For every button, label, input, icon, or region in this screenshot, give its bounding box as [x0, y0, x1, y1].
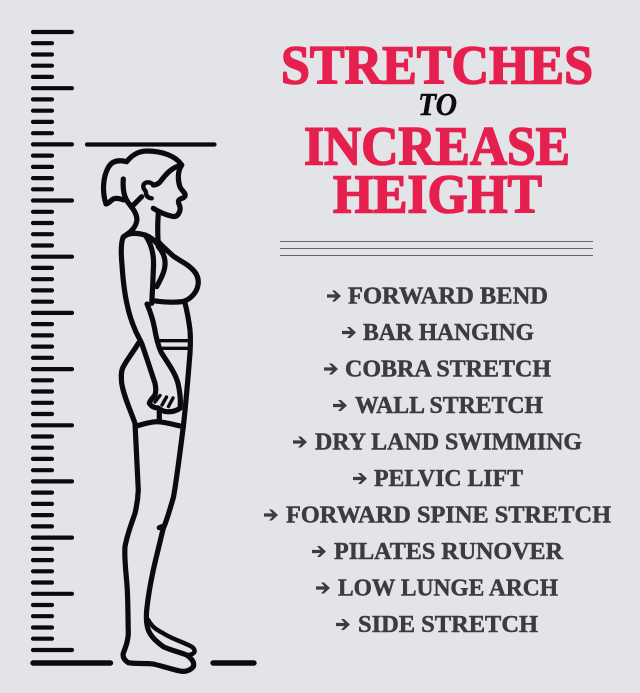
item: cobra stretch: COBRA STRETCH	[345, 356, 551, 382]
item: dry land swimming: DRY LAND SWIMMING	[315, 430, 582, 456]
item: bar hanging: BAR HANGING	[363, 320, 534, 346]
bust and bra	[153, 242, 198, 302]
shorts hem and hand link	[137, 410, 183, 427]
waistband	[160, 341, 190, 348]
title	[281, 34, 593, 224]
second foot	[148, 620, 195, 655]
ground line	[33, 660, 254, 666]
item: wall stretch: WALL STRETCH	[355, 393, 543, 419]
item: forward bend: FORWARD BEND	[348, 284, 548, 310]
title line: height: HEIGHT	[333, 164, 542, 224]
neck back and hair inner line	[123, 179, 142, 237]
face profile	[153, 165, 185, 217]
inner arm and forearm	[145, 235, 180, 412]
item: low lunge arch: LOW LUNGE ARCH	[338, 576, 558, 602]
icon: standing woman outline	[104, 151, 198, 671]
knee mark	[159, 526, 164, 528]
item: forward spine stretch: FORWARD SPINE STRETCH	[286, 502, 611, 528]
item: pelvic lift: PELVIC LIFT	[374, 466, 523, 492]
triple divider lines	[280, 242, 593, 256]
shoulder and back of arm	[121, 233, 158, 408]
list of stretches	[264, 284, 611, 638]
hair and ponytail	[104, 151, 182, 204]
height marker line above head	[87, 142, 214, 147]
item: pilates runover: PILATES RUNOVER	[334, 539, 564, 565]
neck front	[155, 213, 161, 245]
title word: to: TO	[418, 86, 457, 122]
height ruler scale	[33, 32, 72, 650]
item: side stretch: SIDE STRETCH	[358, 612, 538, 638]
title line: increase: INCREASE	[304, 116, 570, 176]
fingers	[155, 396, 173, 406]
ear	[143, 182, 152, 198]
title line: stretches: STRETCHES	[281, 34, 593, 96]
torso front and hips	[121, 303, 194, 671]
